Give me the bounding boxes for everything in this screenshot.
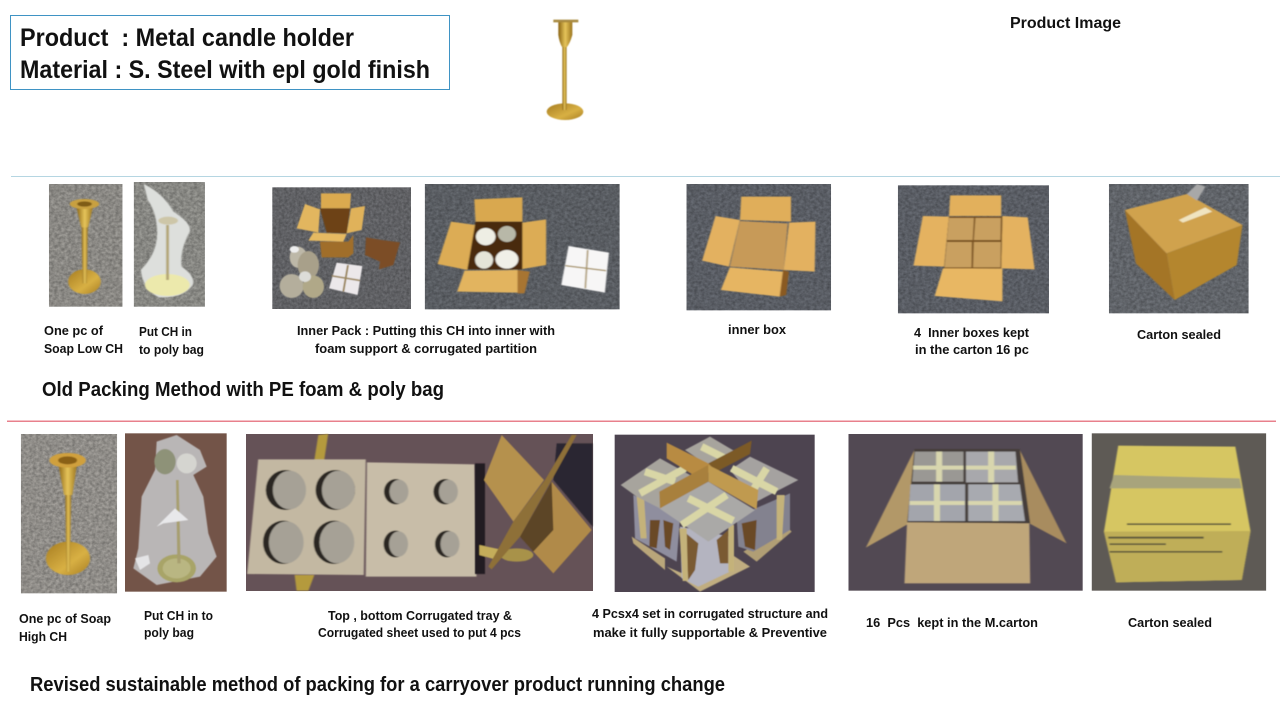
photo: four inner boxes in the carton [898, 185, 1049, 313]
product image: gold candle holder [547, 20, 583, 120]
heading: revised sustainable method: Revised sustainable method of packing for a carryover product running change [30, 674, 725, 696]
caption: corrugated trays and sheet [318, 608, 521, 640]
title line: product: Product : Metal candle holder [20, 24, 354, 52]
caption: inner box: inner box [728, 322, 787, 337]
product image label: Product Image [1010, 15, 1121, 32]
panel: old packing method photos [49, 182, 1249, 313]
caption: one pc of soap high CH [19, 611, 111, 644]
caption: inner pack [297, 323, 555, 356]
photo: open inner box with four compartments [425, 184, 620, 309]
caption: corrugated structure: make it fully supportable & Preventive [593, 625, 827, 640]
photo: sealed carton, revised method [1092, 433, 1266, 591]
photo: candle holder in clear poly bag [125, 433, 227, 592]
caption: one pc of soap low CH [44, 323, 123, 356]
caption: four inner boxes in the carton: 4 Inner boxes kept [914, 325, 1030, 340]
caption: one pc of soap low CH: One pc of [44, 323, 104, 338]
photo: candle holder in poly bag [134, 182, 205, 307]
title box: product and material [10, 16, 450, 90]
caption: put CH in to poly bag: Put CH in [139, 324, 192, 339]
caption: put CH in to poly bag: to poly bag [139, 342, 204, 357]
photo: corrugated trays and sheets [246, 434, 593, 591]
caption: corrugated trays and sheet: Top , bottom Corrugated tray & [328, 608, 512, 623]
caption: carton sealed, old method: Carton sealed [1137, 327, 1221, 342]
caption: corrugated structure: 4 Pcsx4 set in corrugated structure and [592, 606, 828, 621]
caption: put CH in to poly bag [139, 324, 204, 357]
caption: corrugated structure [592, 606, 828, 640]
photo: inner box with foam and partition [272, 187, 411, 309]
caption: four inner boxes in the carton: in the carton 16 pc [915, 342, 1029, 357]
caption: four inner boxes in the carton [914, 325, 1030, 357]
caption: one pc of soap high CH: High CH [19, 629, 67, 644]
caption: corrugated trays and sheet: Corrugated sheet used to put 4 pcs [318, 625, 521, 640]
heading: old packing method: Old Packing Method with PE foam & poly bag [42, 379, 444, 401]
caption: carton sealed, revised method: Carton sealed [1128, 615, 1212, 630]
caption: one pc of soap low CH: Soap Low CH [44, 341, 123, 356]
caption: put CH in to poly bag, revised: Put CH in to [144, 608, 213, 623]
photo: one candle holder, low [49, 184, 122, 307]
caption: one pc of soap high CH: One pc of Soap [19, 611, 111, 626]
photo: sixteen pieces in master carton [848, 434, 1083, 591]
caption: put CH in to poly bag, revised: poly bag [144, 625, 194, 640]
photo: four sets in corrugated structure [615, 435, 815, 592]
photo: sealed carton, old method [1109, 184, 1249, 313]
panel: revised packing method photos [21, 433, 1266, 593]
photo: closed inner box [687, 184, 831, 310]
caption: inner pack: Inner Pack : Putting this CH into inner with [297, 323, 555, 338]
photo: one candle holder, high [21, 434, 117, 593]
title line: material: Material : S. Steel with epl gold finish [20, 56, 430, 84]
caption: sixteen pieces in master carton: 16 Pcs kept in the M.carton [866, 615, 1038, 630]
caption: inner pack: foam support & corrugated partition [315, 341, 537, 356]
caption: put CH in to poly bag, revised [144, 608, 213, 640]
